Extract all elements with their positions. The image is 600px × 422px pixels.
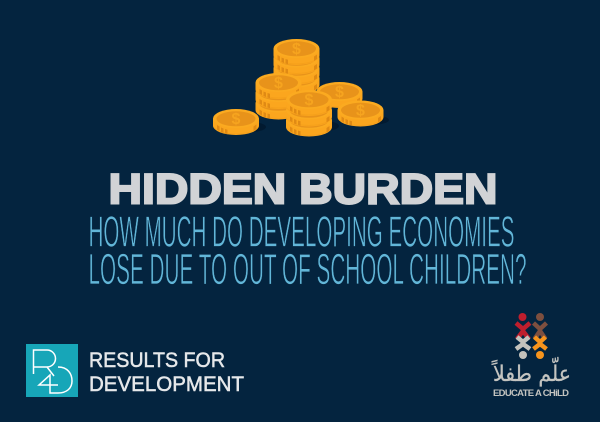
coin single: left xyxy=(213,109,259,135)
logo: Results for Development xyxy=(26,344,244,397)
coin stack: front xyxy=(286,90,332,136)
icon: gold coin stacks xyxy=(213,39,389,136)
child: grey xyxy=(516,337,530,359)
child: orange xyxy=(534,337,546,359)
coin single: left: $ xyxy=(232,111,241,128)
subtitle xyxy=(88,208,526,294)
icon: four children xyxy=(516,313,546,359)
coin single: back right: $ xyxy=(335,84,344,101)
logo text: RESULTS FOR xyxy=(89,349,225,372)
logo text xyxy=(89,349,244,396)
logo: Educate A Child xyxy=(491,313,571,399)
child: brown xyxy=(534,313,546,339)
logo mark: R4D xyxy=(26,344,78,397)
logo text: DEVELOPMENT xyxy=(89,373,244,396)
coin stack: tall back: $ xyxy=(292,41,301,58)
coin shadows xyxy=(226,106,389,132)
coin single: right xyxy=(338,100,384,126)
coin stack: front: $ xyxy=(305,92,314,109)
coin single: back right xyxy=(316,82,362,108)
arabic wordmark: علّم طفلاً xyxy=(491,357,571,387)
coin stack: tall back xyxy=(274,39,320,94)
coin stack: middle xyxy=(256,73,302,120)
coin single: right: $ xyxy=(356,102,365,120)
title: HIDDEN BURDEN xyxy=(108,166,498,214)
child: red xyxy=(516,313,530,339)
latin wordmark: EDUCATE A CHiLD xyxy=(493,388,570,399)
coin stack: middle: $ xyxy=(274,75,283,92)
